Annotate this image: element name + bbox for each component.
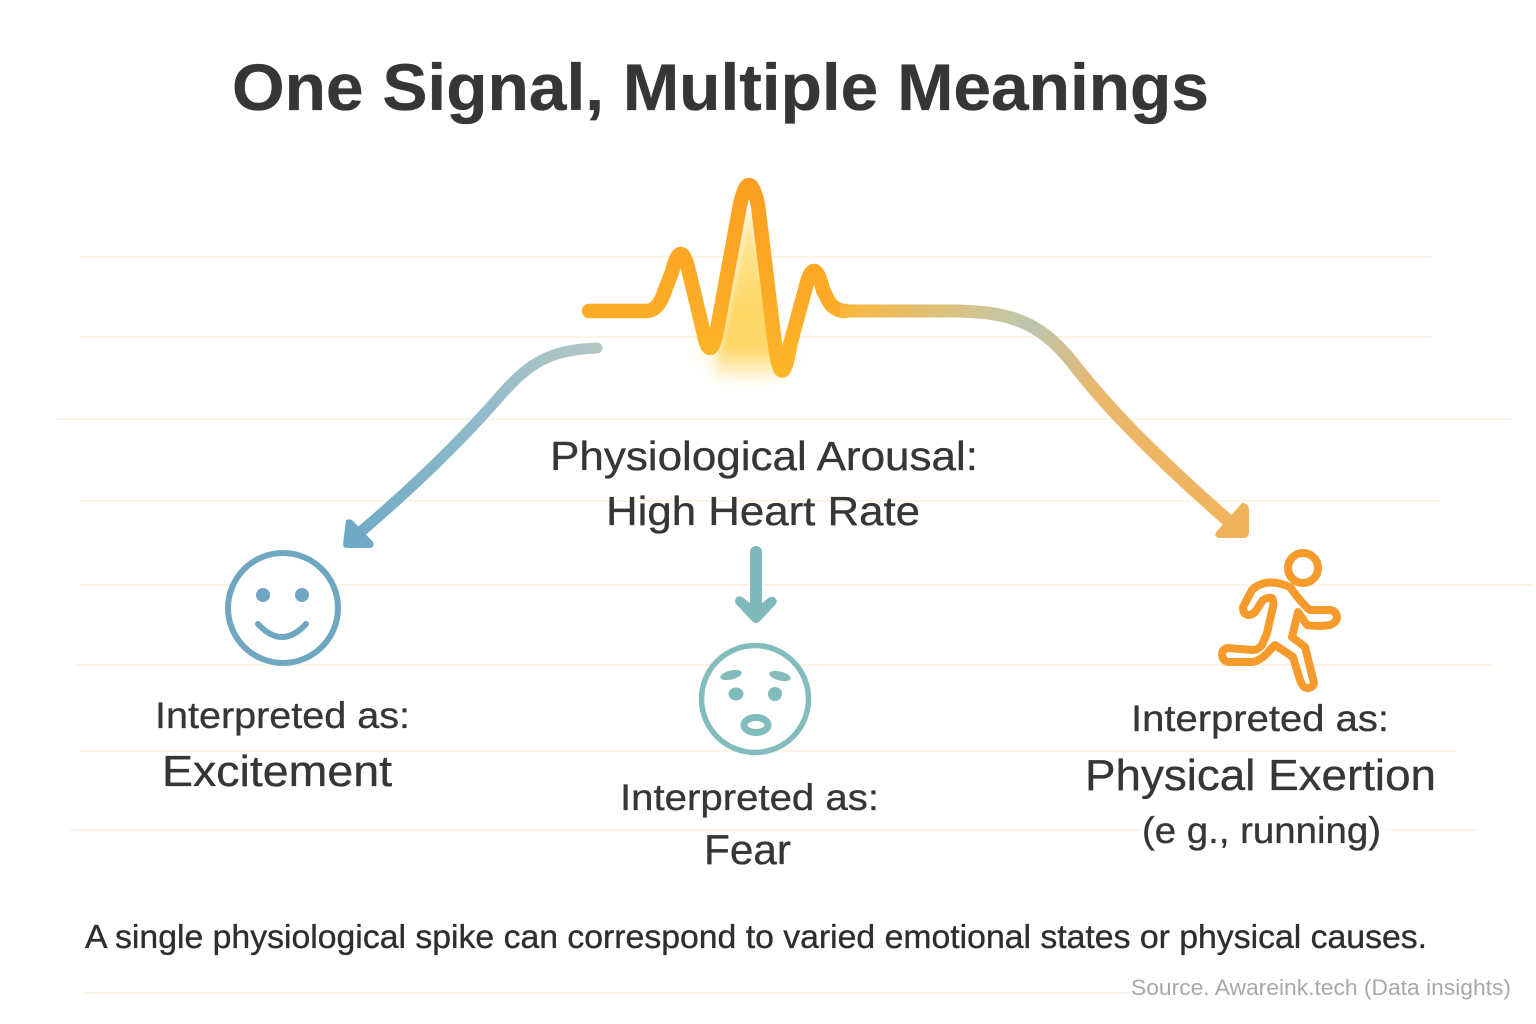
label: physiological arousal	[550, 433, 978, 534]
icon: running figure	[1222, 553, 1337, 688]
icon: fearful face	[702, 646, 808, 752]
label: physical exertion: Physical Exertion	[1085, 751, 1436, 800]
label: physical exertion	[1085, 698, 1436, 851]
label: fear: Fear	[704, 826, 791, 873]
arrow: to excitement	[343, 348, 597, 548]
title: One Signal, Multiple Meanings	[232, 50, 1209, 124]
label: physical exertion: Interpreted as:	[1131, 698, 1389, 739]
label: fear	[620, 777, 879, 873]
spike glow halo	[678, 310, 818, 394]
summary caption: A single physiological spike can correspond to varied emotional states or physical causes.	[85, 918, 1427, 955]
label: physiological arousal: Physiological Arousal:	[550, 433, 978, 479]
label: physical exertion: (e g., running)	[1142, 810, 1381, 851]
spike glow fill	[712, 205, 786, 385]
arrow: to fear	[735, 552, 777, 623]
label: fear: Interpreted as:	[620, 777, 879, 818]
icon: heart rate spike	[589, 185, 846, 394]
heartbeat line	[589, 185, 846, 370]
label: physiological arousal: High Heart Rate	[606, 488, 920, 534]
label: excitement	[155, 695, 410, 796]
source note: Source. Awareink.tech (Data insights)	[1131, 975, 1511, 1000]
arrow: to physical exertion	[840, 311, 1249, 538]
icon: smiling face	[228, 553, 338, 663]
label: excitement: Interpreted as:	[155, 695, 410, 736]
label: excitement: Excitement	[162, 747, 392, 796]
